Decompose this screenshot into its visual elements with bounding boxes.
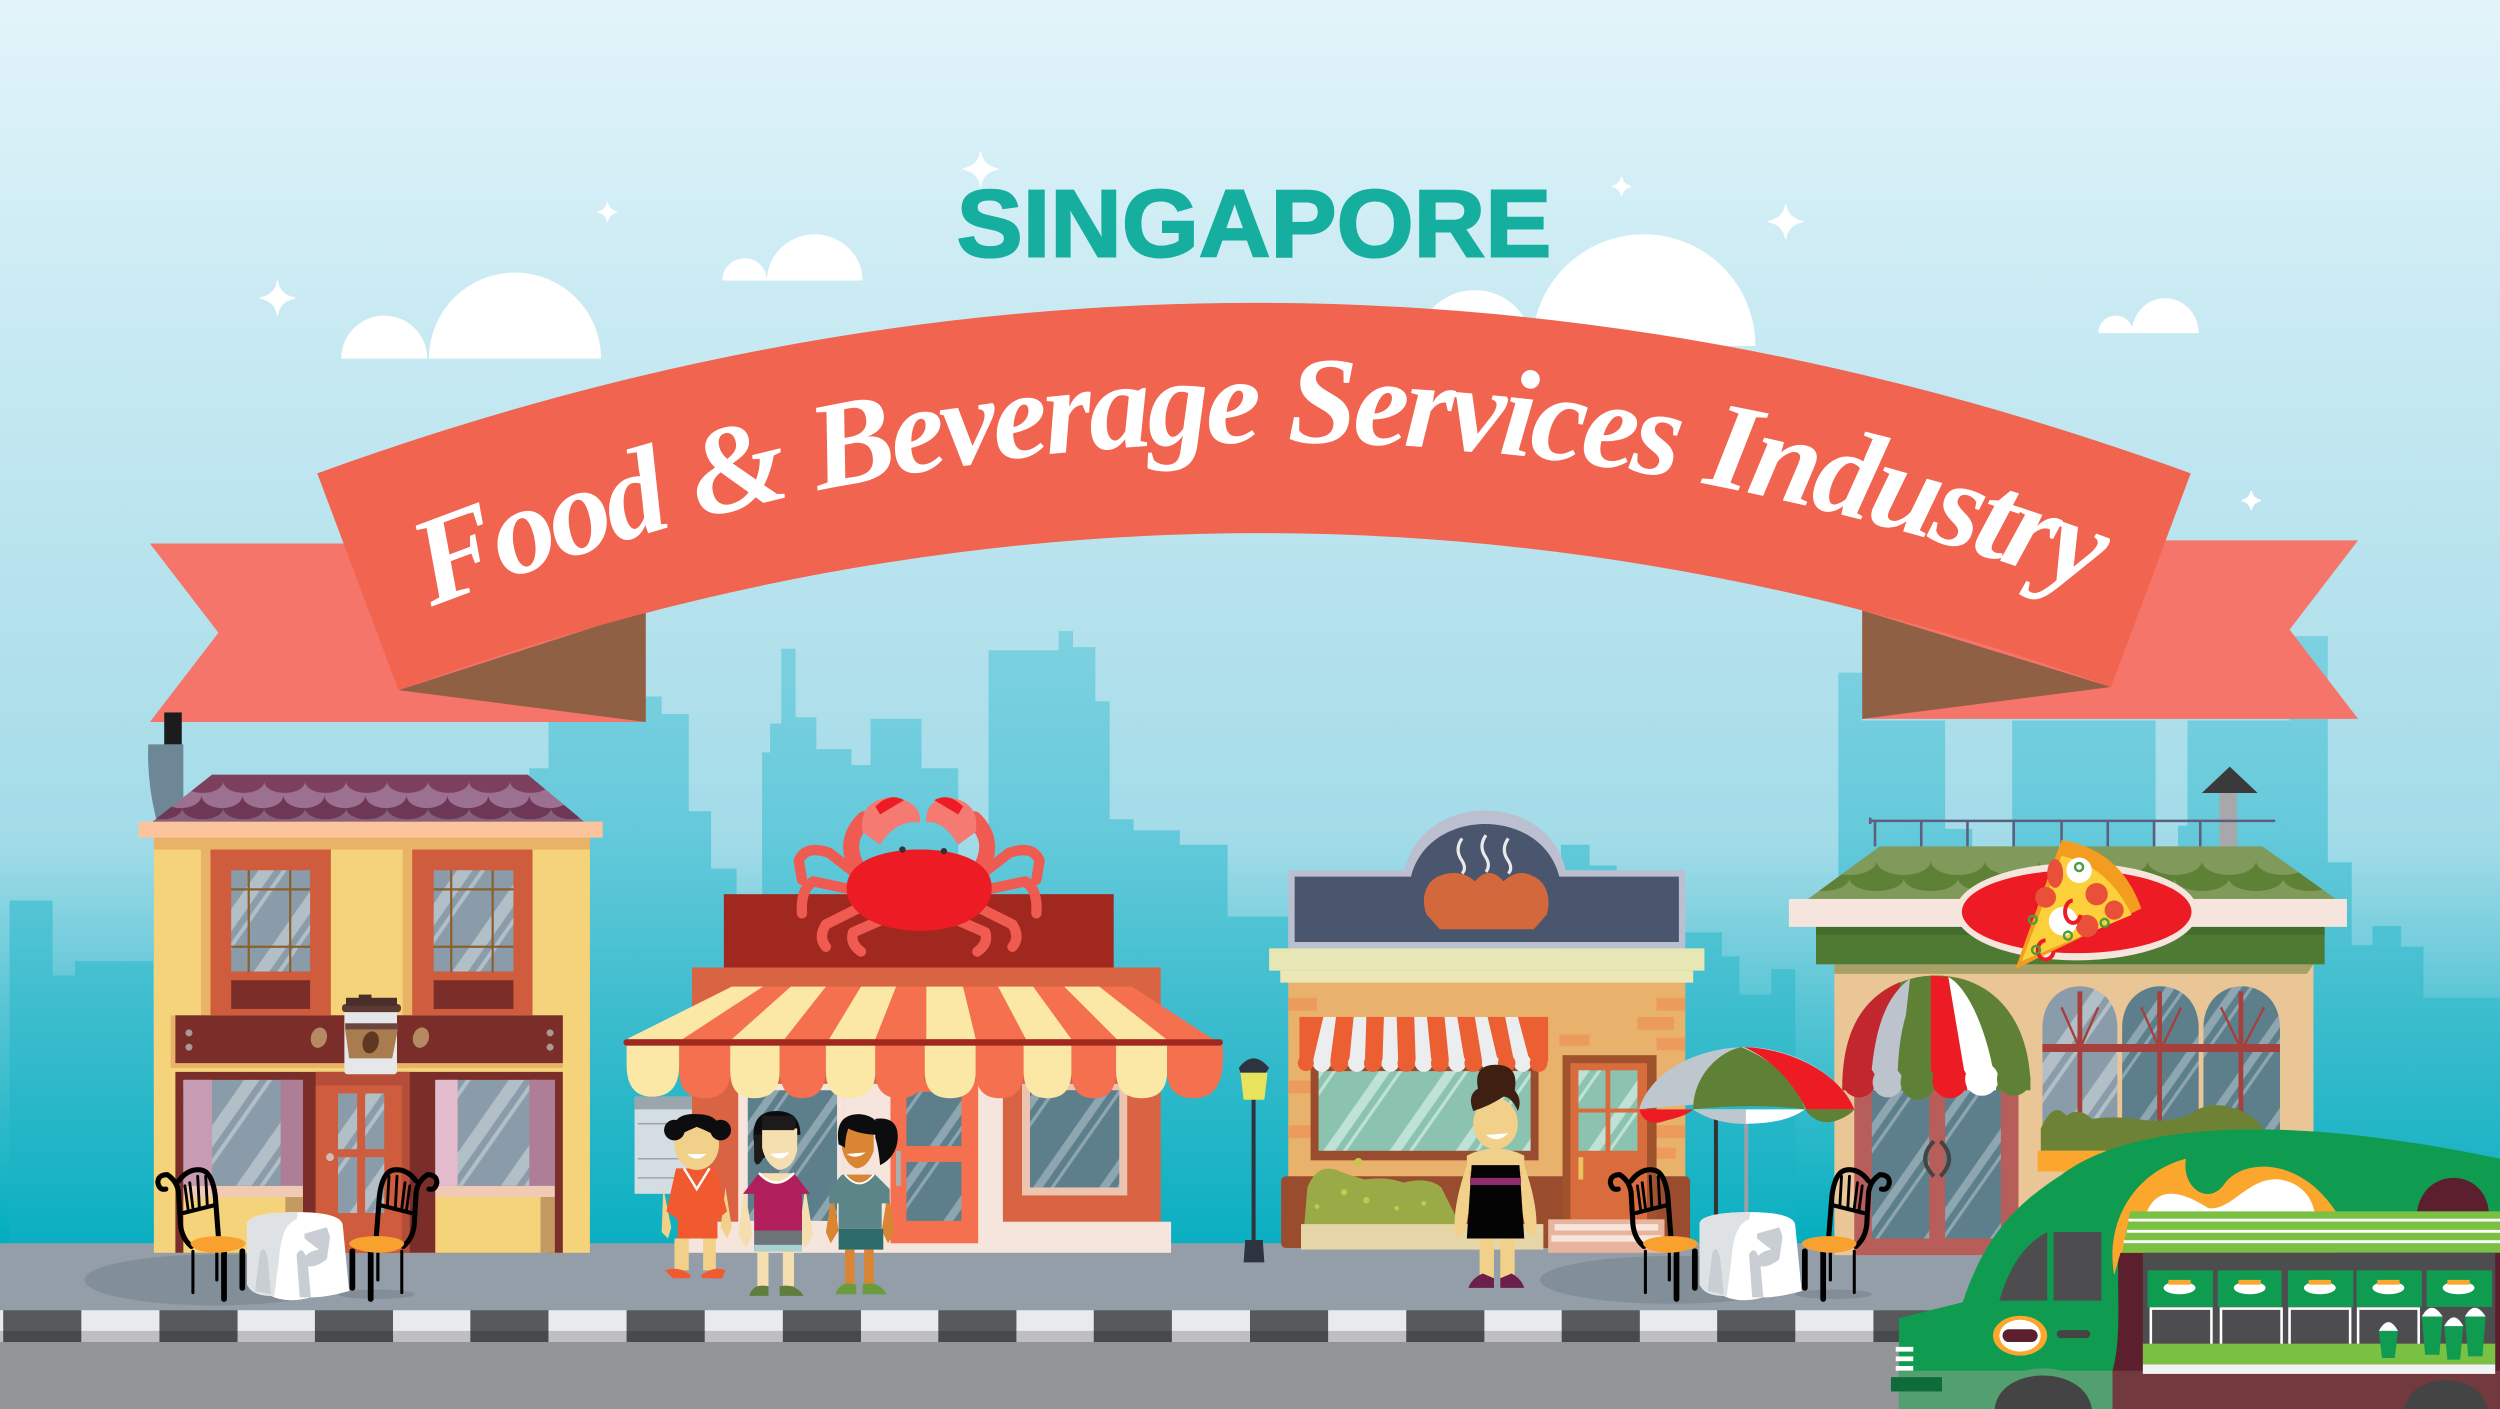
bakery sign [1288,810,1685,948]
door handle [2057,1330,2090,1338]
table shadows [85,1254,1872,1305]
clouds [341,234,2199,359]
drink cups [2379,1308,2486,1360]
awning scallops [627,1046,1223,1098]
upper window right [403,850,533,1015]
banner fold left [399,610,646,722]
bakery awning [1298,1017,1548,1072]
coffee cup sign [342,995,401,1074]
truck service window [2143,1253,2495,1374]
sparkles [260,151,2261,510]
cab logo [1993,1316,2047,1356]
upper window left [201,850,331,1015]
green band [1816,927,2325,964]
truck body [1899,1129,2500,1409]
bakery steps [1548,1219,1665,1253]
bread icon [1424,835,1549,929]
bakery bush [1304,1158,1460,1226]
pizza shop wall [1834,964,2313,1255]
road [0,1342,2500,1409]
crab restaurant [623,797,1223,1253]
bakery planter [1301,1224,1543,1250]
bakery door [1562,1055,1657,1219]
pizza sign oval [1956,863,2198,960]
counter [2143,1344,2495,1374]
sidewalk [0,1243,2500,1310]
restaurant window middle [738,1084,843,1224]
bakery cornice [1269,948,1704,983]
bumper [1891,1377,1942,1391]
pizza slice [2015,840,2141,969]
street lamp [1239,1058,1269,1262]
bakery wall [1288,982,1685,1179]
crab icon [799,797,1040,952]
restaurant base [678,1222,1171,1253]
pizza restaurant [1789,767,2347,1255]
window bush [2041,1105,2274,1151]
house wall [154,832,590,1253]
truck maroon panel [2113,1227,2500,1409]
arched windows [2042,986,2280,1132]
bakery base [1281,1176,1690,1248]
striped dome awning [1842,975,2030,1100]
truck logo large [2112,1159,2336,1275]
roof [151,775,585,822]
menu board [635,1097,692,1194]
crab sign board [724,894,1114,967]
brick details [1288,998,1685,1159]
person orange dress [662,1114,732,1278]
wheels [1990,1371,2487,1409]
entrance door [1854,1087,2018,1255]
woman in black dress [1455,1065,1536,1288]
curb [0,1310,2500,1342]
door [316,1072,410,1253]
cab windows [1999,1232,2101,1301]
chimney [2202,767,2258,846]
striped awning [623,987,1223,1098]
menu panels [2148,1270,2492,1307]
restaurant wall [692,967,1161,1223]
banner tail right [1862,540,2358,719]
pizza roof [1808,846,2336,899]
bakery window [1311,1066,1539,1160]
patio umbrella [1639,1047,1854,1215]
people group [662,1111,898,1296]
restaurant window right [1022,1084,1127,1195]
eave [1789,899,2347,927]
truck lights [1896,1347,1913,1371]
restaurant door [843,1081,1003,1243]
title: SINGAPORE: SINGAPORE [957,171,1551,278]
coffee house [139,712,603,1253]
food truck [1891,1129,2500,1409]
orange planter [2038,1151,2181,1172]
skyline [10,631,2500,1259]
truck awning [2122,1211,2500,1253]
ground floor [175,1072,563,1253]
banner ribbon [317,303,2191,690]
lower body band [1899,1371,2500,1409]
roof railing [1870,818,2275,846]
eave [139,822,603,838]
person teal top [826,1114,898,1294]
shop sign band [171,1015,563,1068]
bistro set right [1610,1170,1889,1300]
bistro set left [158,1170,437,1300]
person magenta top [738,1111,813,1296]
bakery [1269,810,1704,1253]
banner tail left [150,544,646,722]
chimney [148,712,183,819]
display cases [2151,1309,2419,1348]
banner heading: Food & Beverage Services Industry [416,360,2110,607]
truck rear arch [2417,1178,2489,1211]
banner fold right [1862,610,2111,719]
